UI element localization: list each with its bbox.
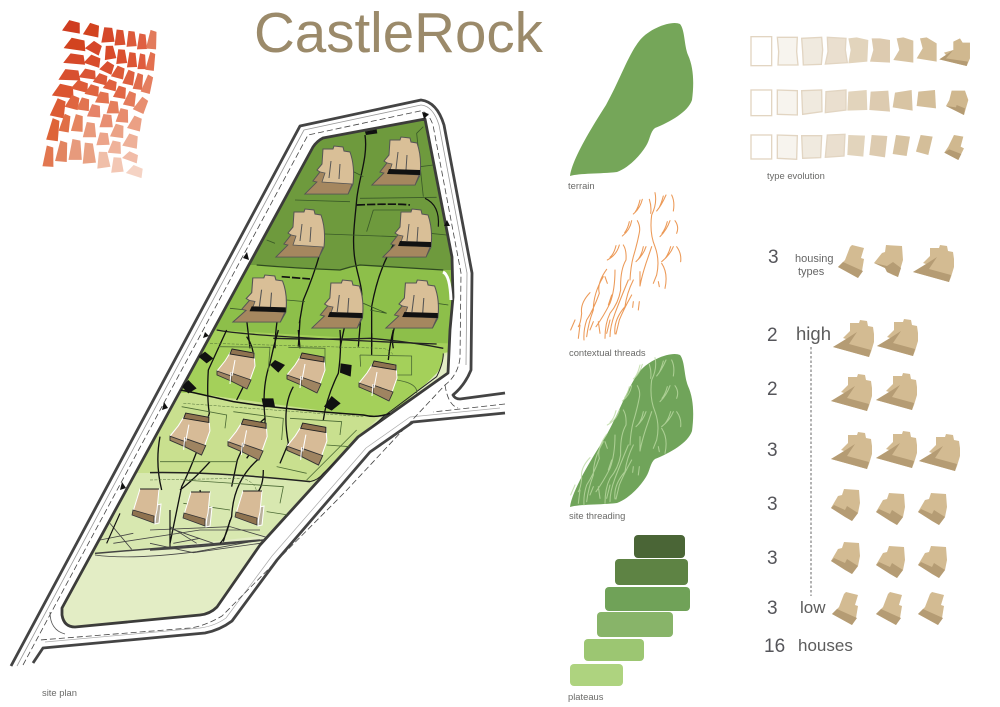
site threading shape (570, 354, 693, 507)
terrain shape (570, 23, 693, 176)
housing types row (768, 245, 954, 282)
low row: low (800, 598, 826, 617)
high row: high (796, 323, 831, 344)
type evolution caption: type evolution (767, 170, 825, 181)
title: CastleRock (254, 1, 544, 64)
housing types row: housing (795, 253, 834, 265)
site threading caption: site threading (569, 510, 625, 521)
parcel interior lines (95, 127, 448, 557)
red mosaic graphic (42, 19, 158, 178)
fifth row (767, 542, 947, 578)
housing types row: 3 (768, 247, 779, 268)
total houses: 16 (764, 636, 785, 657)
high row: 2 (767, 325, 778, 346)
houses: middle terraces (170, 349, 397, 465)
contextual threads caption: contextual threads (569, 347, 646, 358)
vertical dotted scale line (810, 347, 812, 596)
houses: high terraces (233, 137, 438, 328)
upper paths and terrace lines (230, 127, 448, 348)
second row (767, 373, 917, 411)
total houses: houses (798, 636, 853, 655)
high row (767, 319, 918, 357)
fifth row: 3 (767, 548, 778, 569)
houses: low terrace (132, 489, 264, 527)
site plan caption: site plan (42, 687, 77, 698)
plateaus diagram (570, 535, 690, 686)
plateaus caption: plateaus (568, 691, 604, 702)
third row (767, 431, 960, 471)
total houses (764, 636, 853, 657)
housing types row: types (798, 266, 825, 278)
low row: 3 (767, 598, 778, 619)
fourth row: 3 (767, 494, 778, 515)
low row (767, 592, 944, 625)
plateau colour bands (63, 121, 452, 626)
third row: 3 (767, 440, 778, 461)
panel: site plan (0, 100, 505, 666)
second row: 2 (767, 379, 778, 400)
lower paths, terrace lines and black steps (150, 330, 443, 553)
type evolution grid (751, 37, 970, 160)
south terrace lines (95, 510, 260, 557)
contextual threads (571, 193, 681, 340)
road and parcel edges (11, 100, 505, 666)
fourth row (767, 489, 947, 525)
terrain caption: terrain (568, 180, 595, 191)
